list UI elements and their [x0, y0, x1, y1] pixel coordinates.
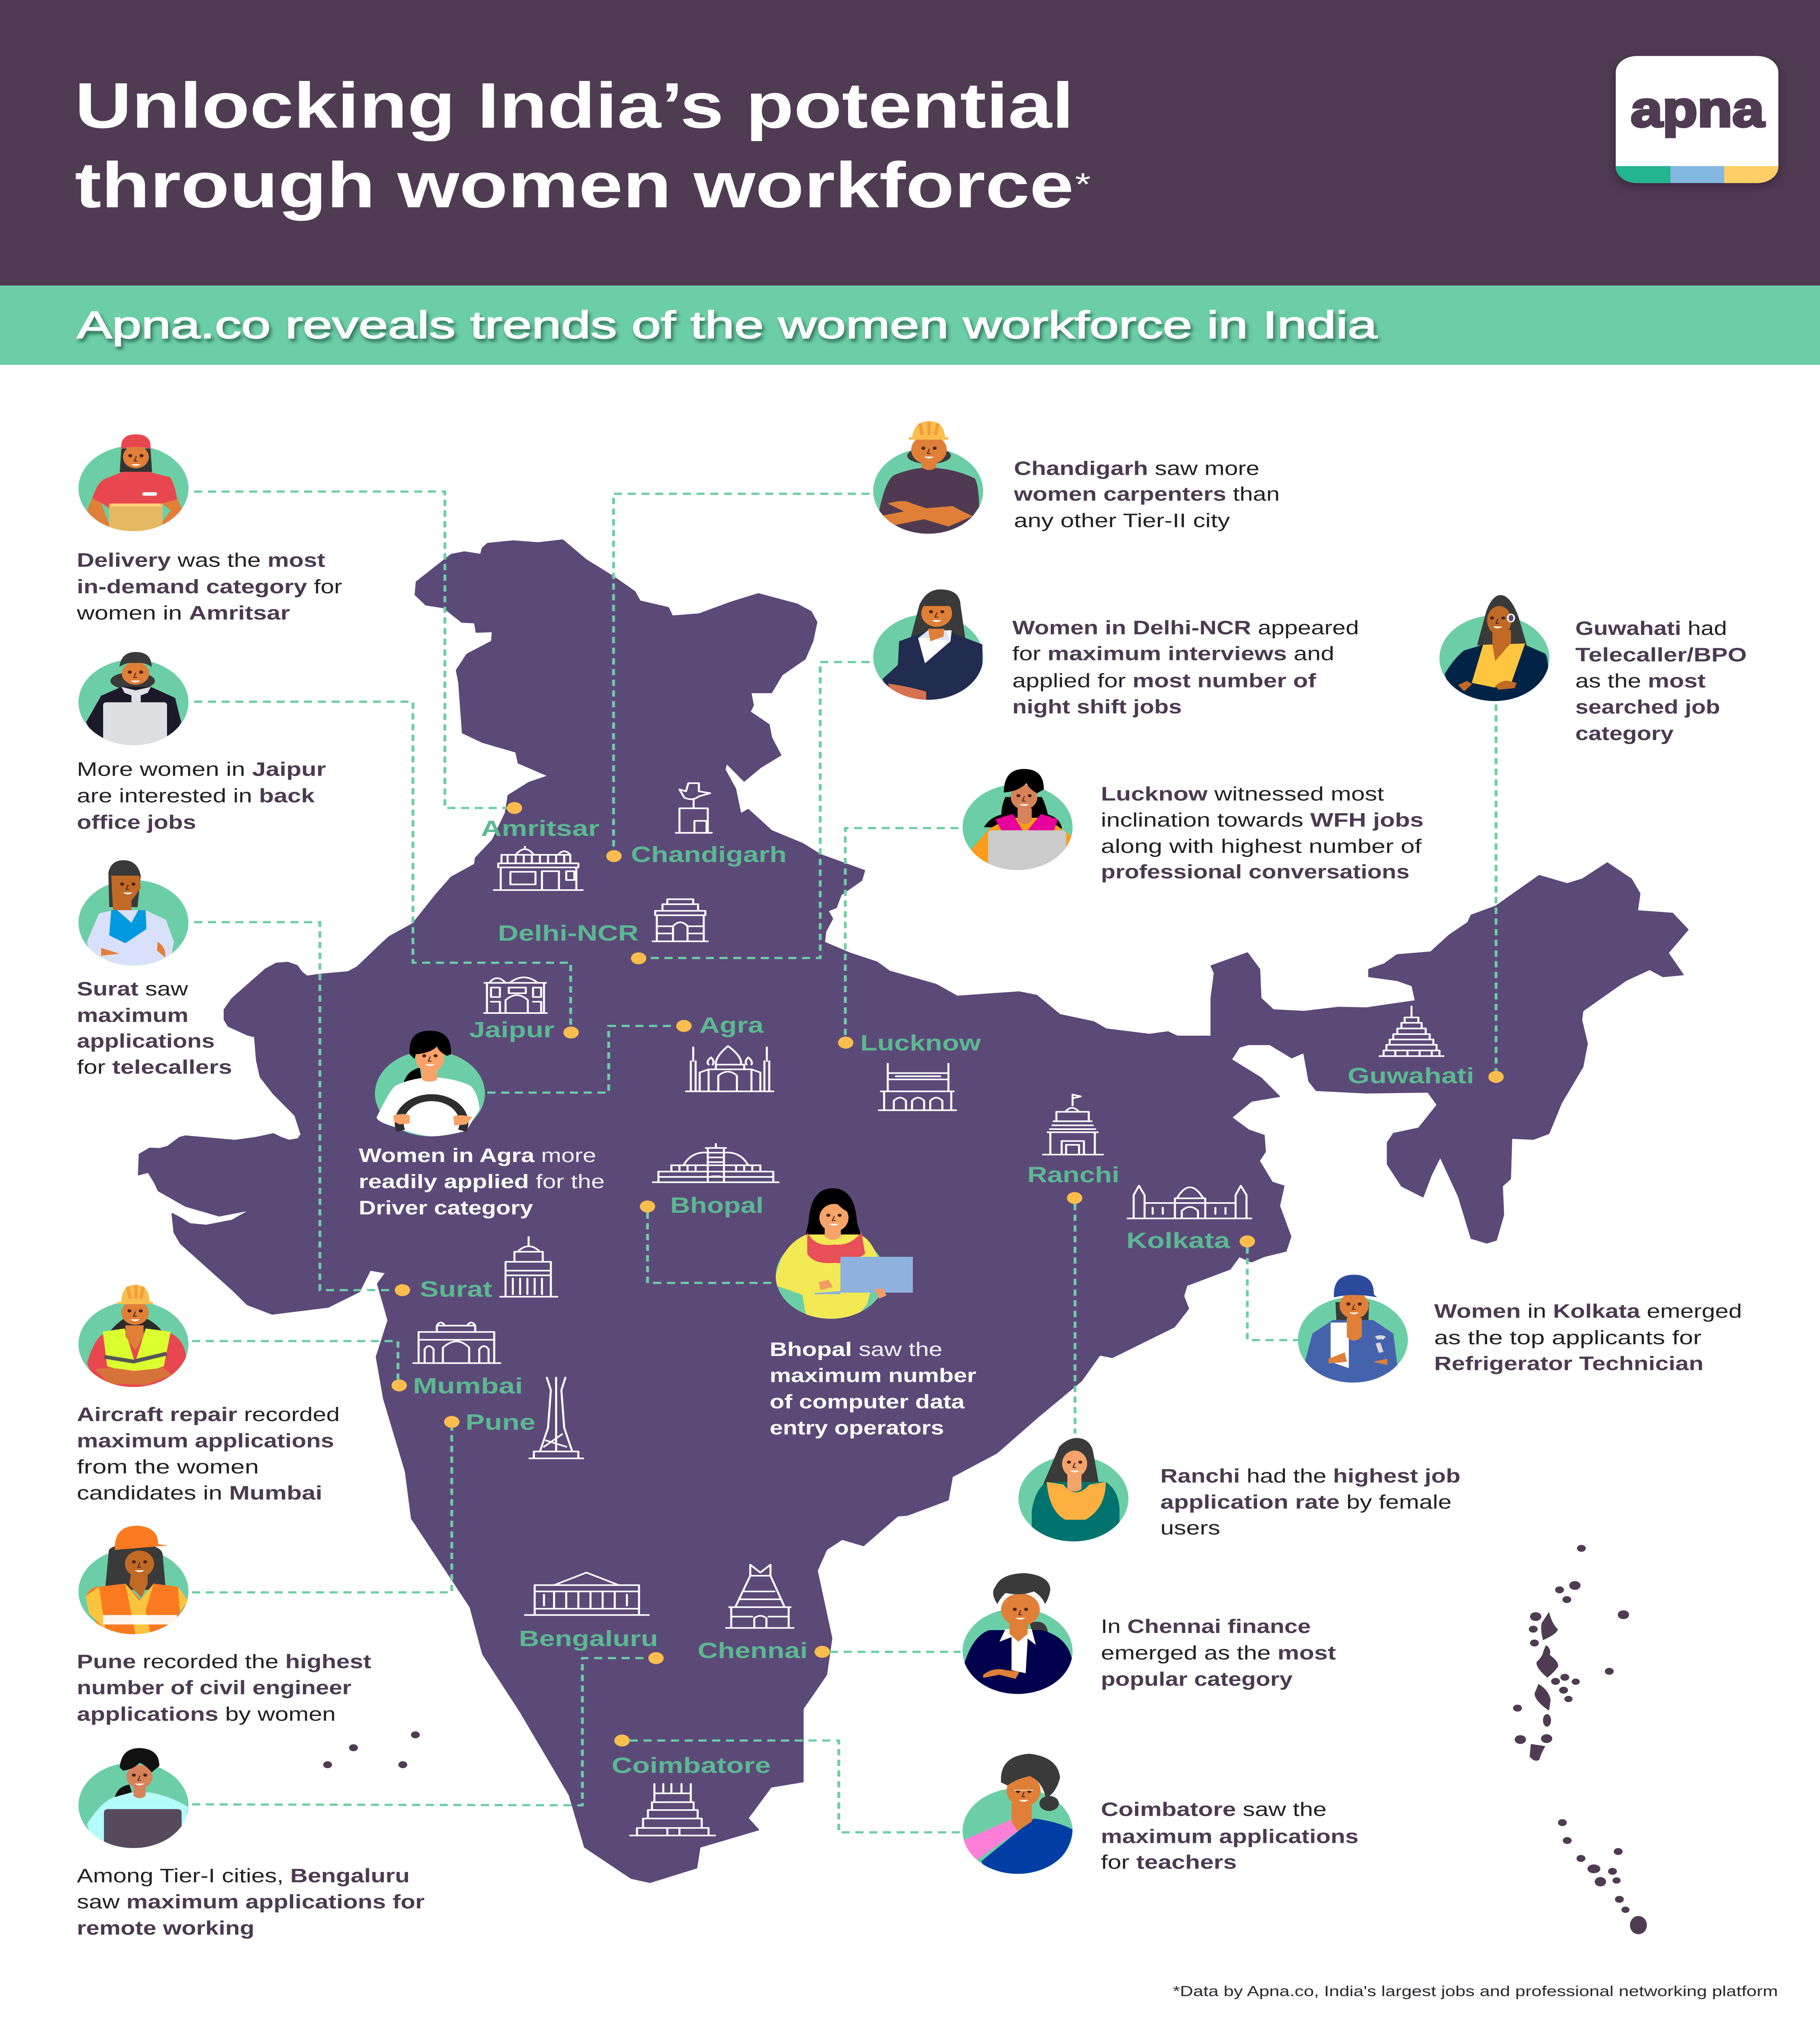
text: Chandigarh carpenters: women carpenters than [1014, 483, 1280, 505]
icon: Jaipur Hawa Mahal [484, 977, 547, 1013]
text: Agra driver: Driver category [359, 1197, 533, 1218]
icon: Chennai temple gopuram [726, 1565, 794, 1628]
text: Jaipur back office [77, 758, 326, 833]
city labels: Kolkata [1126, 1228, 1230, 1253]
text: Agra driver: readily applied for the [359, 1171, 605, 1193]
city labels: Delhi-NCR [498, 921, 639, 945]
text: Bhopal data entry: maximum number [770, 1364, 976, 1386]
text: Guwahati telecaller: Guwahati had [1575, 618, 1727, 639]
map of India [139, 540, 1688, 1882]
text: Ranchi application rate: Ranchi had the highest job [1160, 1465, 1460, 1487]
text: Chandigarh carpenters: Chandigarh saw more [1014, 457, 1259, 479]
text: Pune civil engineer: applications by women [77, 1703, 336, 1725]
text: Bengaluru remote working: saw maximum applications for [77, 1891, 425, 1913]
title: * [1075, 167, 1091, 202]
city labels: Agra [699, 1013, 764, 1037]
text: Bhopal data entry [770, 1338, 976, 1439]
text: Ranchi application rate [1160, 1465, 1460, 1539]
text: Delivery Amritsar: in-demand category for [77, 575, 342, 597]
text: Chennai finance [1101, 1616, 1336, 1690]
text: Chennai finance: In Chennai finance [1101, 1616, 1311, 1637]
icon: Chandigarh Open Hand [676, 783, 712, 833]
text: Surat telecallers: maximum [77, 1004, 188, 1026]
text: Ranchi application rate: application rate by female [1160, 1491, 1452, 1513]
text: Lucknow WFH [1101, 783, 1424, 883]
text: Bhopal data entry: entry operators [770, 1417, 944, 1439]
text: Surat telecallers: Surat saw [77, 978, 188, 1000]
text: Bengaluru remote working: Among Tier-I cities, Bengaluru [77, 1865, 410, 1887]
text: Coimbatore teachers: for teachers [1101, 1851, 1237, 1873]
text: Chennai finance: popular category [1101, 1668, 1293, 1690]
Andaman islands [1513, 1545, 1629, 1761]
text: Agra driver [359, 1144, 605, 1218]
avatar: refrigerator technician Kolkata [1298, 1275, 1408, 1383]
avatar: woman Ranchi [1018, 1438, 1128, 1542]
city labels: Guwahati [1348, 1064, 1474, 1088]
text: Aircraft repair Mumbai: candidates in Mumbai [77, 1482, 322, 1504]
city labels: Surat [420, 1277, 492, 1302]
text: Kolkata technician: Refrigerator Technician [1434, 1352, 1704, 1374]
text: Bengaluru remote working [77, 1865, 425, 1939]
icon: Guwahati Kamakhya temple [1380, 1007, 1443, 1056]
text: Coimbatore teachers: Coimbatore saw the [1101, 1798, 1327, 1820]
text: Chandigarh carpenters [1014, 457, 1280, 531]
text: Lucknow WFH: professional conversations [1101, 861, 1409, 883]
city labels: Ranchi [1027, 1163, 1120, 1187]
text: Guwahati telecaller: as the most [1575, 670, 1706, 692]
city labels: Lucknow [860, 1031, 981, 1055]
icon: Coimbatore temple [630, 1784, 715, 1836]
city labels: Bengaluru [519, 1626, 658, 1651]
title [75, 70, 1091, 221]
text: Bengaluru remote working: remote working [77, 1917, 254, 1939]
header band [0, 0, 1820, 286]
connector lines [192, 492, 1496, 1832]
avatar: teacher Coimbatore [963, 1754, 1073, 1874]
apna logo: apna [1631, 81, 1765, 137]
text: Coimbatore teachers: maximum applications [1101, 1825, 1359, 1847]
text: Delivery Amritsar: women in Amritsar [76, 602, 290, 624]
text: Aircraft repair Mumbai: from the women [77, 1456, 259, 1478]
avatar: telecaller woman Guwahati [1439, 595, 1549, 701]
text: Lucknow WFH: Lucknow witnessed most [1101, 783, 1384, 805]
city labels: Chennai [698, 1639, 808, 1663]
avatar: telecaller woman Surat [78, 860, 188, 966]
text: Surat telecallers: applications [77, 1030, 215, 1052]
text: Delhi-NCR night shift [1012, 617, 1359, 717]
subtitle: Apna.co reveals trends of the women workforce in India [77, 304, 1377, 347]
city labels: Pune [466, 1410, 535, 1435]
text: Ranchi application rate: users [1160, 1517, 1220, 1539]
title: through women workforce [75, 149, 1074, 221]
avatar: night shift woman Delhi [873, 589, 983, 700]
title: Unlocking India’s potential [75, 70, 1074, 142]
city labels: Amritsar [481, 816, 599, 841]
text: Surat telecallers: for telecallers [77, 1056, 232, 1078]
text: Pune civil engineer: number of civil engineer [77, 1677, 351, 1698]
text: Guwahati telecaller: Telecaller/BPO [1575, 644, 1747, 666]
avatar: aircraft repair woman [78, 1285, 188, 1387]
icon: Mumbai Gateway of India [413, 1322, 500, 1363]
text: Delhi-NCR night shift: for maximum interviews and [1012, 643, 1334, 664]
icon: Bhopal Sanchi Stupa [653, 1144, 779, 1182]
city labels: Chandigarh [631, 842, 787, 867]
text: Agra driver: Women in Agra more [359, 1144, 596, 1166]
text: Kolkata technician [1434, 1300, 1742, 1374]
icon: Agra Taj Mahal [686, 1046, 773, 1091]
text: Lucknow WFH: inclination towards WFH jobs [1101, 809, 1424, 831]
avatar: back office woman [78, 652, 188, 747]
apna logo [1616, 56, 1778, 183]
city marker dots [392, 802, 1504, 1747]
text: Jaipur back office: office jobs [77, 811, 196, 833]
icon: Ranchi temple [1043, 1094, 1103, 1155]
text: Guwahati telecaller: searched job [1575, 696, 1720, 718]
text: Delhi-NCR night shift: applied for most number of [1012, 670, 1316, 692]
text: Aircraft repair Mumbai: maximum applications [77, 1430, 334, 1452]
text: Delhi-NCR night shift: Women in Delhi-NCR appeared [1012, 617, 1359, 639]
text: Bhopal data entry: Bhopal saw the [770, 1338, 942, 1360]
icon: Kolkata Victoria Memorial [1128, 1186, 1251, 1218]
text: Chennai finance: emerged as the most [1101, 1642, 1336, 1664]
icon: Amritsar Golden Temple [494, 847, 583, 890]
icon: Pune tower [529, 1377, 583, 1458]
icon: India Gate Delhi [653, 899, 708, 941]
text: Delivery Amritsar: Delivery was the most [77, 549, 325, 571]
avatar: finance woman Chennai [963, 1573, 1073, 1694]
avatar: remote worker Bengaluru [78, 1748, 188, 1849]
icon: Lucknow Bara Imambara [879, 1064, 956, 1110]
avatar: driver woman Agra [375, 1031, 485, 1136]
avatar: carpenter Chandigarh [873, 421, 983, 534]
text: Guwahati telecaller [1575, 618, 1747, 744]
text: Guwahati telecaller: category [1575, 723, 1674, 744]
text: Lucknow WFH: along with highest number of [1101, 835, 1422, 857]
text: Delhi-NCR night shift: night shift jobs [1012, 696, 1182, 717]
city labels: Bhopal [670, 1193, 764, 1218]
text: Chandigarh carpenters: any other Tier-II city [1014, 510, 1230, 531]
text: Kolkata technician: as the top applicants for [1434, 1327, 1701, 1348]
text: Pune civil engineer: Pune recorded the highest [77, 1651, 371, 1672]
footnote: *Data by Apna.co, India's largest jobs and professional networking platform [1173, 1983, 1778, 1999]
Lakshadweep islands [323, 1731, 420, 1768]
city labels [413, 816, 1474, 1778]
city labels: Jaipur [469, 1017, 554, 1042]
text: Surat telecallers [77, 978, 232, 1078]
subtitle band [0, 286, 1820, 365]
avatar: delivery woman [78, 434, 188, 533]
icon: Bengaluru Vidhana Soudha [525, 1573, 649, 1615]
city labels: Coimbatore [612, 1753, 771, 1778]
icon: Surat building [500, 1237, 557, 1297]
text: Delivery Amritsar [76, 549, 342, 624]
text: Aircraft repair Mumbai: Aircraft repair recorded [77, 1403, 340, 1425]
text: Pune civil engineer [77, 1651, 371, 1725]
text: Aircraft repair Mumbai [77, 1403, 340, 1504]
city labels: Mumbai [413, 1374, 523, 1398]
text: Jaipur back office: More women in Jaipur [77, 758, 326, 780]
text: Jaipur back office: are interested in back [77, 785, 315, 806]
avatar: data entry operator Bhopal [776, 1188, 913, 1319]
avatar: civil engineer Pune [78, 1526, 188, 1634]
text: Coimbatore teachers [1101, 1798, 1359, 1873]
text: Kolkata technician: Women in Kolkata emerged [1434, 1300, 1742, 1322]
avatar: WFH woman Lucknow [963, 769, 1073, 871]
text: Bhopal data entry: of computer data [770, 1391, 965, 1413]
Nicobar islands [1558, 1819, 1647, 1934]
